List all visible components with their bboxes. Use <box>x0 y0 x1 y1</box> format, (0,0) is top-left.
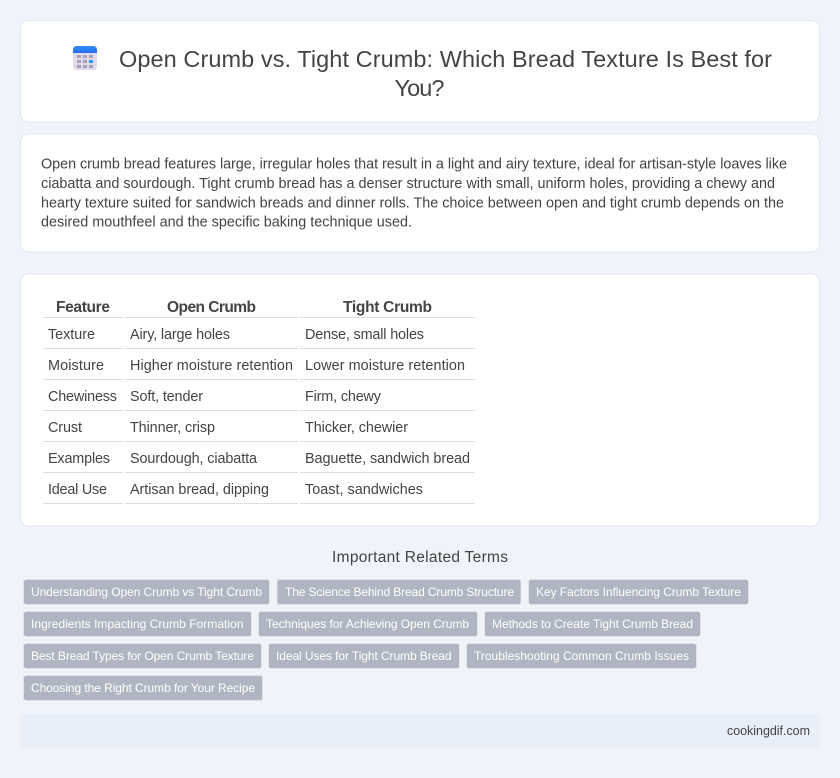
text block: description paragraph: hearty texture suited for sandwich breads and dinner rolls. The choice between open and tight crumb depends on the <box>41 196 784 212</box>
tag: Key Factors Influencing Crumb Texture <box>536 585 741 599</box>
row: chewiness: Soft, tender <box>130 389 203 405</box>
tag: Techniques for Achieving Open Crumb <box>266 617 469 631</box>
row: examples: Baguette, sandwich bread <box>305 451 470 467</box>
footer source text: cookingdif.com <box>727 724 810 738</box>
text block: description paragraph: Open crumb bread features large, irregular holes that result in a light and airy texture, ideal for artisan-style loaves like <box>41 156 787 172</box>
tag <box>528 580 748 604</box>
table header <box>43 299 475 318</box>
tag: The Science Behind Bread Crumb Structure <box>285 585 514 599</box>
row: chewiness <box>43 389 475 410</box>
panel: related term tags <box>24 580 748 700</box>
table header: Feature <box>56 299 110 316</box>
text block: description paragraph: ciabatta and sourdough. Tight crumb bread has a denser structure with small, uniform holes, providing a chewy and <box>41 176 775 192</box>
tag: Choosing the Right Crumb for Your Recipe <box>31 681 255 695</box>
row: ideal use <box>43 482 475 504</box>
tag <box>268 644 460 668</box>
tag: Methods to Create Tight Crumb Bread <box>492 617 693 631</box>
footer <box>20 714 820 748</box>
tag <box>258 612 478 636</box>
panel: title card <box>20 20 820 122</box>
row: moisture: Higher moisture retention <box>130 358 293 374</box>
tag <box>24 580 270 604</box>
text block: description paragraph: desired mouthfeel and the specific baking technique used. <box>41 214 412 230</box>
row: texture: Airy, large holes <box>130 327 230 343</box>
row: examples: Sourdough, ciabatta <box>130 451 257 467</box>
row: moisture <box>43 358 475 380</box>
row: examples <box>43 451 475 472</box>
row: crust: Thicker, chewier <box>305 420 408 436</box>
row: texture: Texture <box>48 327 95 343</box>
icon: calendar <box>73 46 97 70</box>
row: examples: Examples <box>48 451 110 467</box>
title <box>119 46 772 101</box>
row: ideal use: Ideal Use <box>48 482 107 498</box>
tag <box>24 612 252 636</box>
title: You? <box>394 75 444 101</box>
tag: Ingredients Impacting Crumb Formation <box>31 617 244 631</box>
row: chewiness: Firm, chewy <box>305 389 382 405</box>
row: crust: Thinner, crisp <box>130 420 215 436</box>
row: chewiness: Chewiness <box>48 389 117 405</box>
panel: description <box>20 134 820 252</box>
tag: Best Bread Types for Open Crumb Texture <box>31 649 254 663</box>
row: moisture: Lower moisture retention <box>305 358 465 374</box>
table header: Tight Crumb <box>343 299 432 316</box>
tag: Understanding Open Crumb vs Tight Crumb <box>31 585 262 599</box>
row: texture <box>43 327 475 348</box>
tag <box>24 644 262 668</box>
row: ideal use: Toast, sandwiches <box>305 482 423 498</box>
tag <box>24 676 262 700</box>
heading: related terms: Important Related Terms <box>332 549 508 566</box>
row: moisture: Moisture <box>48 358 104 374</box>
tag <box>466 644 696 668</box>
tag <box>277 580 521 604</box>
text block: description paragraph <box>41 156 787 230</box>
row: ideal use: Artisan bread, dipping <box>130 482 269 498</box>
title: Open Crumb vs. Tight Crumb: Which Bread Texture Is Best for <box>119 46 772 72</box>
tag <box>484 612 700 636</box>
table header: Open Crumb <box>167 299 256 316</box>
tag: Ideal Uses for Tight Crumb Bread <box>276 649 452 663</box>
row: crust <box>43 420 475 442</box>
tag: Troubleshooting Common Crumb Issues <box>474 649 689 663</box>
row: texture: Dense, small holes <box>305 327 424 343</box>
row: crust: Crust <box>48 420 82 436</box>
panel: comparison table <box>20 274 820 526</box>
